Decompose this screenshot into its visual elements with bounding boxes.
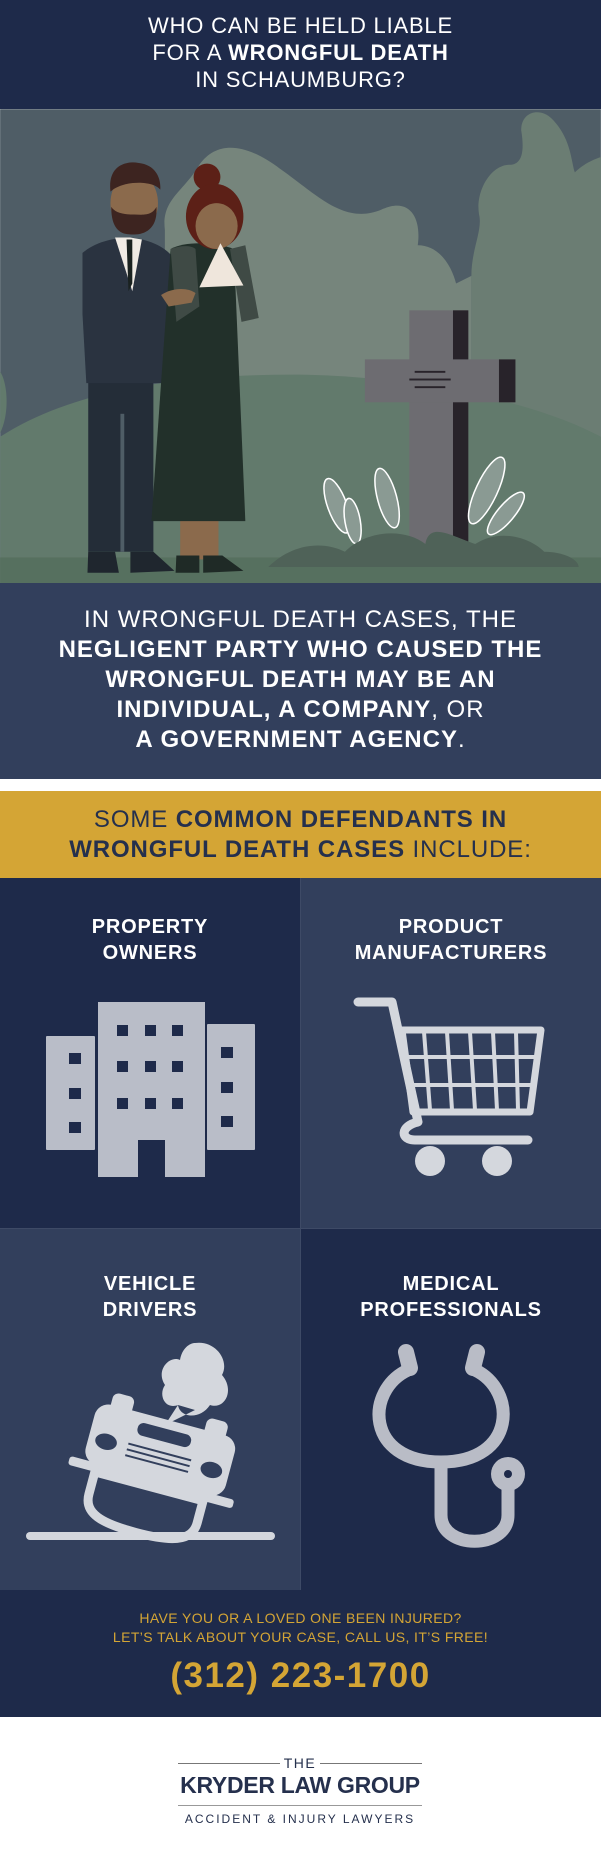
title band [0, 0, 601, 109]
heading [103, 1273, 197, 1321]
logo: ACCIDENT & INJURY LAWYERS [185, 1812, 415, 1826]
plants [318, 453, 530, 545]
heading: VEHICLE [104, 1273, 196, 1295]
defendants heading [69, 806, 532, 863]
intro text: WRONGFUL DEATH MAY BE AN [105, 666, 496, 693]
panel: medical professionals [300, 1228, 601, 1590]
woman [151, 164, 259, 573]
illustration: mourners at grave [0, 109, 601, 583]
heading [360, 1273, 542, 1321]
man [82, 162, 174, 573]
logo [178, 1755, 422, 1826]
heading: PRODUCT [399, 916, 503, 938]
cta text: HAVE YOU OR A LOVED ONE BEEN INJURED? [139, 1610, 462, 1626]
icon: shopping cart [354, 998, 544, 1176]
gold heading band [0, 791, 601, 878]
title: WHO CAN BE HELD LIABLE [148, 13, 453, 38]
title [148, 13, 453, 92]
icon: stethoscope [372, 1344, 525, 1548]
intro text: INDIVIDUAL, A COMPANY, OR [116, 696, 485, 723]
panel: property owners [0, 878, 300, 1228]
icon: overturned car [26, 1342, 275, 1544]
heading [92, 916, 208, 964]
logo: KRYDER LAW GROUP [180, 1772, 420, 1798]
heading: OWNERS [103, 942, 197, 964]
heading: PROPERTY [92, 916, 208, 938]
intro text: A GOVERNMENT AGENCY. [135, 726, 466, 753]
call to action band [0, 1590, 601, 1717]
gravestone cross [365, 310, 515, 548]
heading: MEDICAL [403, 1273, 499, 1295]
title: IN SCHAUMBURG? [195, 67, 406, 92]
panel: vehicle drivers [0, 1228, 300, 1590]
defendants heading: WRONGFUL DEATH CASES INCLUDE: [69, 836, 532, 863]
heading: MANUFACTURERS [355, 942, 547, 964]
defendants heading: SOME COMMON DEFENDANTS IN [94, 806, 507, 833]
intro text [59, 606, 542, 753]
cta text [113, 1610, 488, 1645]
intro text: NEGLIGENT PARTY WHO CAUSED THE [59, 636, 542, 663]
icon: building [46, 1002, 255, 1177]
cta text: LET’S TALK ABOUT YOUR CASE, CALL US, IT’S FREE! [113, 1629, 488, 1645]
panel: product manufacturers [300, 878, 601, 1228]
intro text panel [0, 583, 601, 779]
intro text: IN WRONGFUL DEATH CASES, THE [84, 606, 517, 633]
heading: PROFESSIONALS [360, 1299, 542, 1321]
title: FOR A WRONGFUL DEATH [152, 40, 449, 65]
phone number: (312) 223-1700 [170, 1656, 431, 1695]
heading: DRIVERS [103, 1299, 197, 1321]
logo: THE [284, 1755, 316, 1771]
heading [355, 916, 547, 964]
